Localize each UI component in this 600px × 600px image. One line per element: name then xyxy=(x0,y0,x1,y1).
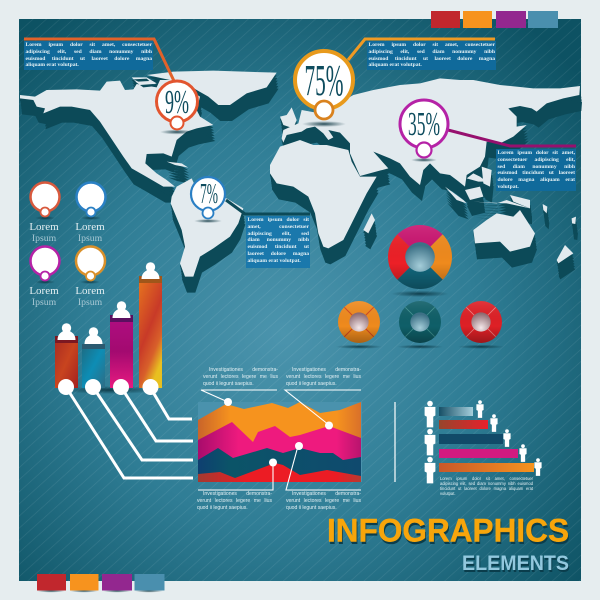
subtitle: ELEMENTS: ELEMENTS xyxy=(463,554,570,577)
swatches: top xyxy=(431,11,558,28)
pin: 35%: 35% xyxy=(408,106,440,143)
text block: chart top left: Investigationes demonstra- xyxy=(209,367,278,373)
legend: Lorem Ipsum orange xyxy=(75,246,105,308)
chart callout lines and dots xyxy=(198,390,361,490)
text block: center callout: laoreet dolore magna xyxy=(248,251,309,257)
legend: Lorem Ipsum purple: Ipsum xyxy=(32,297,57,308)
text block: chart bottom right: Investigationes demonstra- xyxy=(292,491,361,497)
text block: chart bottom right xyxy=(286,491,361,511)
text block: top center callout: adipiscing elit, sed diam nonummy nibh xyxy=(368,49,495,55)
pin: 35% xyxy=(400,100,448,162)
title: INFOGRAPHICS: INFOGRAPHICS xyxy=(328,515,570,551)
pin: 7%: 7% xyxy=(200,179,218,210)
donut: teal xyxy=(397,301,443,349)
text block: center callout: Lorem ipsum dolor sit xyxy=(248,217,309,223)
text block: chart top left xyxy=(203,367,278,387)
area chart xyxy=(198,402,362,482)
text block: right callout: dolore magna aliquam erat xyxy=(498,177,575,183)
text block: top left callout: euismod tincidunt ut laoreet dolore magna xyxy=(26,56,152,62)
divider line xyxy=(394,402,396,482)
swatches: bottom xyxy=(37,574,164,592)
donut: orange xyxy=(336,301,382,349)
text block: chart bottom left: quod ii legunt saepius. xyxy=(197,505,248,511)
text block: horizontal bars caption: Lorem ipsum dolor sit amet, consectetuer xyxy=(440,476,533,480)
text block: top left callout: Lorem ipsum dolor sit amet, consectetuer xyxy=(26,42,152,48)
text block: horizontal bars caption: adipiscing elit, sed diam nonummy nibh euismod xyxy=(440,481,533,486)
text block: right callout: sed diam nonummy nibh xyxy=(498,164,575,170)
callout line: gold 75% xyxy=(348,39,495,60)
pin: 75%: 75% xyxy=(304,56,344,105)
text block: chart top left: quod ii legunt saepius. xyxy=(203,381,254,387)
horizontal bar chart xyxy=(425,400,542,483)
text block: center callout: adipiscing elit, sed xyxy=(248,231,309,237)
text block: center callout: aliquam erat volutpat. xyxy=(248,258,301,264)
text block: chart top left: verunt lectores legere me lius xyxy=(203,374,278,380)
text block: right callout: euismod tincidunt ut laoreet xyxy=(498,170,575,176)
world map xyxy=(20,71,582,293)
text block: chart bottom left xyxy=(197,491,272,511)
text block: center callout: euismod tincidunt ut xyxy=(248,244,309,250)
legend: Lorem Ipsum orange: Ipsum xyxy=(78,297,103,308)
text block: top center callout xyxy=(367,41,496,70)
legend: Lorem Ipsum red: Ipsum xyxy=(32,233,57,244)
text block: top center callout: Lorem ipsum dolor sit amet, consectetuer xyxy=(368,42,495,48)
connector lines from bars to chart xyxy=(58,379,193,478)
legend: Lorem Ipsum purple: Lorem xyxy=(29,285,59,297)
text block: top left callout: aliquam erat volutpat. xyxy=(26,62,79,68)
text block: chart bottom left: verunt lectores legere me lius xyxy=(197,498,272,504)
text block: horizontal bars caption: volutpat. xyxy=(440,491,455,496)
text block: chart bottom right: verunt lectores legere me lius xyxy=(286,498,361,504)
text block: chart bottom right: quod ii legunt saepius. xyxy=(286,505,337,511)
legend: Lorem Ipsum blue xyxy=(75,182,106,244)
text block: center callout xyxy=(246,216,310,268)
legend: Lorem Ipsum red xyxy=(29,182,60,244)
text block: horizontal bars caption xyxy=(440,476,533,496)
text block: top center callout: euismod tincidunt ut laoreet dolore magna xyxy=(368,56,495,62)
donut: large xyxy=(388,225,452,297)
bar chart: vertical bars with people xyxy=(55,262,162,394)
text block: top left callout xyxy=(24,41,153,70)
pin: 7% xyxy=(191,177,225,223)
text block: chart top right xyxy=(286,367,361,387)
text block: chart top right: verunt lectores legere me lius xyxy=(286,374,361,380)
text block: horizontal bars caption: tincidunt ut laoreet dolore magna aliquam erat xyxy=(440,486,533,491)
text block: chart top right: quod ii legunt saepius. xyxy=(286,381,337,387)
callout line: purple 35% xyxy=(448,130,576,146)
text block: top center callout: aliquam erat volutpat. xyxy=(368,62,422,68)
subtitle: ELEMENTS: ELEMENTS xyxy=(462,552,569,575)
legend: Lorem Ipsum red: Lorem xyxy=(29,221,59,233)
pin: 9% xyxy=(156,81,198,134)
legend: Lorem Ipsum purple xyxy=(29,246,60,308)
text block: chart top right: Investigationes demonstra- xyxy=(292,367,361,373)
title: INFOGRAPHICS: INFOGRAPHICS xyxy=(327,512,569,548)
donut: red xyxy=(458,301,504,349)
text block: right callout: volutpat. xyxy=(498,184,519,190)
pin: 75% xyxy=(295,51,353,127)
text block: center callout: diam nonummy nibh xyxy=(248,237,309,243)
text block: chart bottom left: Investigationes demonstra- xyxy=(203,491,272,497)
text block: right callout: consectetuer adipiscing elit, xyxy=(498,157,575,163)
text block: top left callout: adipiscing elit, sed diam nonummy nibh xyxy=(26,49,152,55)
pin: 9%: 9% xyxy=(165,84,189,121)
legend: Lorem Ipsum orange: Lorem xyxy=(75,285,105,297)
legend: Lorem Ipsum blue: Ipsum xyxy=(78,233,103,244)
text block: right callout: Lorem ipsum dolor sit amet, xyxy=(498,150,575,156)
text block: right callout xyxy=(496,149,576,191)
callout line: teal 7% xyxy=(226,200,310,214)
callout line: orange 9% xyxy=(24,39,174,81)
legend: Lorem Ipsum blue: Lorem xyxy=(75,221,105,233)
text block: center callout: amet, consectetuer xyxy=(248,224,309,230)
